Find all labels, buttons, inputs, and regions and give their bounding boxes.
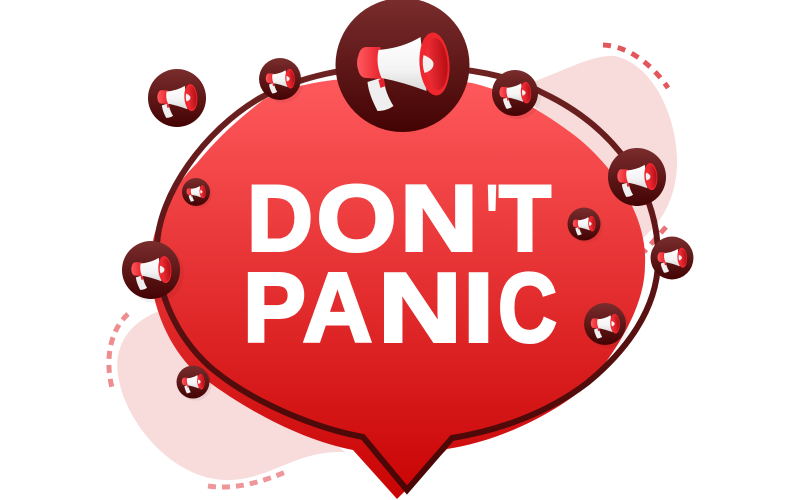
icon: megaphone badge upper left — [148, 69, 206, 127]
icon: megaphone badge top right — [492, 70, 541, 119]
speech bubble fill — [150, 77, 645, 499]
icon: megaphone badge top left — [259, 58, 304, 103]
heading: PANIC: I — [463, 252, 494, 362]
heading: PANIC: A — [302, 252, 372, 362]
heading: PANIC: C — [498, 252, 557, 362]
heading: DON'T: ' — [486, 166, 498, 270]
icon: megaphone badge left — [122, 241, 184, 303]
heading: DON'T: O — [316, 166, 396, 270]
icon: megaphone badge far right — [651, 237, 693, 279]
icon: megaphone badge lower left — [177, 366, 212, 401]
heading: PANIC: N — [378, 252, 462, 362]
icon: megaphone badge inner right — [568, 208, 603, 243]
icon: large megaphone badge — [336, 0, 470, 132]
heading: DON'T: D — [247, 166, 313, 270]
heading: DON'T: T — [499, 166, 551, 270]
dashes: right — [644, 227, 666, 252]
heading: DON'T: N — [400, 166, 478, 270]
speech bubble outline — [157, 66, 658, 490]
icon: megaphone badge inner left — [182, 178, 212, 208]
heading: PANIC — [243, 252, 557, 362]
dashes: top right — [603, 45, 668, 88]
icon: megaphone badge lower right — [584, 303, 629, 348]
dashes: left — [109, 314, 128, 391]
heading: PANIC: P — [243, 252, 306, 362]
heading: DON'T — [247, 166, 551, 270]
blob: bottom left background — [117, 312, 345, 480]
icon: megaphone badge right — [608, 148, 666, 206]
blob: top right background — [515, 56, 677, 240]
dashes: bottom — [208, 471, 288, 487]
